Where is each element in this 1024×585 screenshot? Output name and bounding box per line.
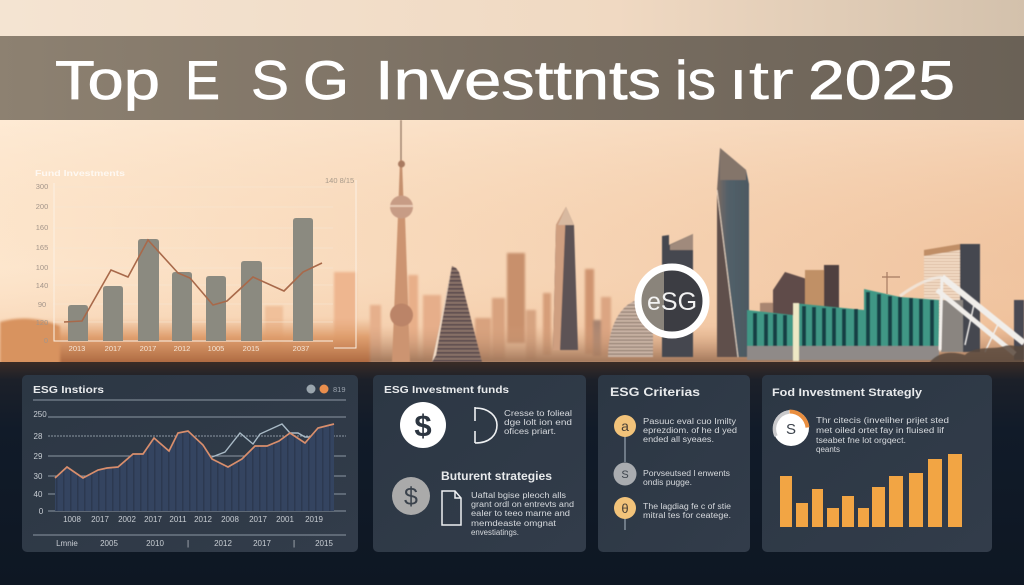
panel title: ESG Criterias — [610, 385, 700, 399]
ESG emblem — [638, 267, 706, 335]
x axis labels: 2017 — [249, 515, 267, 524]
chart note: 140 8/15 — [325, 176, 354, 185]
icon: dollar coin — [400, 402, 446, 448]
criterion 2 — [614, 462, 730, 487]
right cluster buildings — [760, 265, 839, 330]
x axis labels: 2015 — [243, 344, 259, 353]
y axis labels: 40 — [34, 490, 43, 499]
strategy description: met oiled ortet fay in fluised lif — [816, 426, 945, 435]
criterion 1: ended all syeaes. — [643, 435, 714, 444]
y axis labels: 100 — [36, 263, 48, 272]
criterion 3: θ — [621, 501, 629, 516]
strategy description: qeants — [816, 445, 840, 454]
bar chart — [780, 454, 962, 527]
secondary axis labels: 2005 — [100, 539, 118, 548]
y axis labels: 300 — [36, 182, 48, 191]
secondary axis labels: 2015 — [315, 539, 333, 548]
subheading: Buturent strategies — [441, 471, 552, 483]
panel title: Fod Investment Strategly — [772, 387, 923, 399]
legend: 819 — [333, 385, 346, 394]
panel: ESG criteria — [598, 375, 750, 552]
strategy description: grant ordl on entrevts and — [471, 500, 574, 509]
bars — [68, 218, 313, 341]
x axis labels — [69, 344, 309, 353]
icon: document — [442, 491, 461, 525]
x axis labels: 2017 — [140, 344, 156, 353]
x axis labels: 2017 — [105, 344, 121, 353]
title: Top — [55, 49, 160, 111]
panel: ESG investment funds — [373, 375, 586, 552]
criterion 3 — [614, 497, 731, 520]
secondary axis labels: | — [187, 539, 189, 548]
y axis labels: 0 — [39, 507, 44, 516]
strategy description: tseabet fne lot orgqect. — [816, 436, 906, 445]
lattice bridge — [900, 277, 1024, 354]
strategy description: envestiatings. — [471, 528, 519, 537]
criterion 1: eprezdiom. of he d yed — [643, 426, 737, 435]
title — [55, 49, 955, 111]
strategy description: Uaftal bgise pleoch alls — [471, 491, 566, 500]
fund description: Cresse to folieal — [504, 409, 572, 418]
x axis labels: 2008 — [221, 515, 239, 524]
green building — [747, 289, 939, 361]
y axis labels — [33, 410, 47, 516]
line: blue series — [212, 424, 310, 457]
strategy description: ealer to teeo marne and — [471, 509, 570, 518]
criterion 1: a — [621, 418, 629, 434]
criterion 2: ondis pugge. — [643, 478, 692, 487]
ESG emblem: eSG — [647, 288, 697, 316]
secondary axis labels — [56, 539, 333, 548]
upper chart: fund investments — [35, 168, 356, 353]
fund description: ofices priart. — [504, 427, 556, 436]
y axis labels: 28 — [34, 432, 43, 441]
x axis labels: 1008 — [63, 515, 81, 524]
y axis labels — [36, 182, 48, 345]
icon: dollar coin: $ — [414, 408, 432, 443]
secondary axis labels: 2010 — [146, 539, 164, 548]
tower behind emblem — [662, 234, 693, 357]
y axis labels: 30 — [34, 472, 43, 481]
twisted tower — [553, 207, 578, 350]
x axis labels: 2017 — [91, 515, 109, 524]
x axis labels: 2012 — [174, 344, 190, 353]
panel: fund investment strategy — [762, 375, 992, 552]
dome — [608, 300, 653, 357]
strategy description — [816, 416, 949, 454]
tallest skyscraper — [717, 148, 749, 357]
title: S — [251, 49, 289, 111]
strategy description: Thr citecis (inveliher prijet sted — [816, 416, 949, 425]
title: E — [185, 49, 220, 111]
strategy description — [471, 491, 574, 537]
pyramid tower — [432, 266, 482, 362]
secondary axis labels: | — [293, 539, 295, 548]
x axis labels: 2013 — [69, 344, 85, 353]
y axis labels: 160 — [36, 223, 48, 232]
x axis labels: 2017 — [144, 515, 162, 524]
y axis labels: 140 — [36, 281, 48, 290]
criterion 3: mitral tes for ceatege. — [643, 511, 731, 520]
title: Investtnts — [375, 49, 661, 111]
fund description — [504, 409, 572, 436]
icon: grey dollar coin — [392, 477, 430, 515]
x axis labels: 1005 — [208, 344, 224, 353]
criterion 3: The lagdiag fe c of stie — [643, 502, 731, 511]
shoreline trees — [930, 345, 1024, 363]
strategy description: memdeaste omgnat — [471, 519, 557, 528]
legend — [306, 384, 346, 394]
chart title: Fund Investments — [35, 168, 125, 178]
panel title: ESG Investment funds — [384, 384, 509, 396]
x axis labels — [63, 515, 323, 524]
secondary axis labels: Lmnie — [56, 539, 78, 548]
title: ıtr — [728, 49, 794, 111]
construction crane — [882, 272, 900, 294]
icon: gauge coin: S — [786, 421, 796, 438]
criterion 1 — [614, 415, 737, 444]
line: orange series — [55, 424, 334, 478]
x axis labels: 2012 — [194, 515, 212, 524]
skyline: TV tower — [390, 120, 413, 362]
y axis labels: 165 — [36, 243, 48, 252]
y axis labels: 0 — [44, 336, 48, 345]
criterion 2: S — [621, 469, 629, 481]
x axis labels: 2001 — [276, 515, 294, 524]
secondary axis labels: 2012 — [214, 539, 232, 548]
criterion 1: Pasuuc eval cuo Imilty — [643, 417, 736, 426]
skyline: central towers — [432, 148, 1024, 362]
x axis labels: 2002 — [118, 515, 136, 524]
x axis labels: 2019 — [305, 515, 323, 524]
trend line — [64, 240, 322, 322]
y axis labels: 250 — [33, 410, 47, 419]
panel: ESG institutions line chart — [22, 375, 358, 552]
area under line — [55, 424, 334, 511]
title: G — [303, 49, 349, 111]
dark lower section — [0, 362, 1024, 585]
y axis labels: 120 — [36, 318, 48, 327]
icon: bracket arc — [475, 407, 497, 443]
fund description: dge lolt ion end — [504, 418, 572, 427]
skyline: hazy background buildings — [0, 253, 1024, 365]
secondary axis labels: 2017 — [253, 539, 271, 548]
title: is — [675, 49, 716, 111]
sky background — [0, 0, 1024, 365]
icon: gauge coin — [773, 410, 809, 446]
y axis labels: 90 — [38, 300, 46, 309]
x axis labels: 2037 — [293, 344, 309, 353]
y axis labels: 200 — [36, 202, 48, 211]
x axis labels: 2011 — [169, 515, 187, 524]
title: 2025 — [808, 49, 955, 111]
y axis labels: 29 — [34, 452, 43, 461]
title band — [0, 36, 1024, 120]
panel title: ESG Instiors — [33, 384, 104, 396]
icon: grey dollar coin: $ — [404, 483, 418, 511]
tall right building — [924, 244, 1024, 360]
criterion 2: Porvseutsed l enwents — [643, 469, 730, 478]
